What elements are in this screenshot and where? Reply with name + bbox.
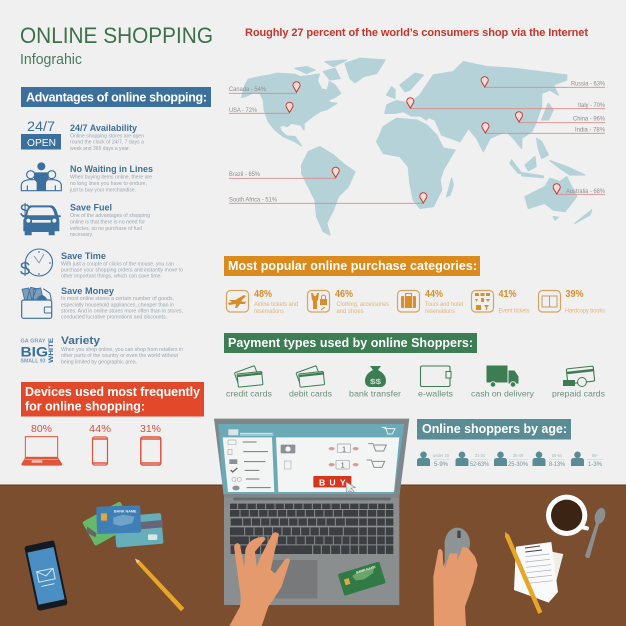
text: no waiting in lines: No Waiting in Lines — [70, 164, 153, 174]
payment: debit cards — [289, 366, 332, 398]
text: save money: conducted lucrative promotions and discounts. — [61, 315, 167, 321]
age group: 21-34 — [456, 452, 490, 468]
category: tours: Tours and hotel — [425, 301, 463, 308]
pencil — [135, 559, 184, 611]
heading: world consumers statement: Roughly 27 percent of the world’s consumers shop via the Internet — [245, 27, 588, 39]
category: hardcopy books: 39% — [566, 289, 584, 300]
icon: variety typography: WHITE — [48, 337, 55, 363]
icon: variety typography: SMALL 93 — [20, 359, 46, 365]
device: phone 44%: 44% — [89, 424, 111, 435]
payment: debit cards: debit cards — [289, 388, 332, 398]
payment: bank transfer: bank transfer — [349, 388, 401, 398]
text: no waiting in lines — [69, 164, 153, 194]
age group: 50-64 — [532, 452, 566, 468]
text: save money: In most online stores a certain number of goods, — [61, 296, 174, 302]
icon: 24/7 open: 24/7 — [27, 119, 55, 134]
panel: purchase categories — [224, 256, 605, 315]
icon: 24/7 open — [21, 119, 61, 150]
map: country labels: Italy - 70% — [578, 102, 605, 109]
icon: variety typography: GA GRAY — [20, 338, 46, 344]
heading: devices: Devices used most frequently — [25, 385, 200, 399]
payment: cash on delivery: cash on delivery — [471, 388, 535, 398]
text: save money — [61, 286, 183, 321]
screen quantity boxes: 1 — [341, 460, 345, 469]
map: country labels: China - 96% — [573, 116, 605, 122]
map: location pins — [286, 77, 560, 203]
icon: wallet with money — [22, 287, 52, 318]
screen quantity controls — [329, 447, 359, 466]
credit cards stack — [82, 501, 164, 548]
age group: 50-64: 50-64 — [552, 453, 562, 458]
device: phone 44% — [89, 424, 111, 465]
heading: payment: Payment types used by online Shoppers: — [228, 336, 473, 350]
laptop screen — [218, 424, 404, 494]
notes and pencil — [505, 532, 563, 614]
screen product area — [276, 437, 399, 492]
text: 24/7 availability: round the clock of 24/7, 7 days a — [70, 140, 145, 146]
map: country labels: Canada - 54% — [229, 86, 266, 93]
desk items: right side — [433, 495, 607, 626]
title: Infograhic — [20, 52, 82, 68]
spoon — [585, 507, 607, 558]
touchpad — [267, 560, 317, 598]
map: leader lines — [229, 87, 605, 203]
map: country labels: South Africa - 51% — [229, 196, 277, 204]
device: tablet 31% — [140, 424, 161, 465]
category: tours: 44% — [425, 289, 443, 300]
smartphone — [24, 540, 68, 611]
text: variety: being limited by geographic area. — [61, 360, 137, 366]
desk surface — [0, 484, 626, 626]
text: save fuel: Save Fuel — [70, 202, 112, 212]
category: clothing: 46% — [335, 289, 353, 300]
category: event tickets: 41% — [498, 289, 517, 300]
age group: under 20: under 20 — [433, 453, 449, 458]
text: save fuel: online is that there is no need for — [70, 220, 145, 226]
age group: 35-49 — [494, 452, 529, 468]
heading: payment — [224, 333, 477, 353]
chart: world map with country rates — [229, 58, 605, 235]
age group: 65 plus: 1-3% — [588, 462, 603, 468]
text: save fuel: necessary. — [70, 232, 93, 238]
map: country labels — [229, 80, 605, 204]
age group: 50-64: 8-13% — [549, 462, 566, 468]
panel: payment types — [224, 333, 605, 398]
category: airline tickets: 48% — [254, 289, 272, 300]
heading: age: Online shoppers by age: — [422, 422, 567, 436]
laptop lid — [214, 419, 409, 497]
text: no waiting in lines: no long lines you have to endure, — [70, 181, 147, 187]
hand on mouse — [433, 528, 478, 626]
payment: bank transfer — [349, 366, 401, 398]
screen cart icons — [367, 427, 395, 467]
icon: people in line — [21, 162, 61, 191]
map: country labels: Russia - 63% — [571, 80, 605, 88]
credit cards stack: BANK NAME — [114, 510, 137, 514]
text: variety: other parts of the country or even the world without — [61, 353, 178, 359]
category: clothing — [308, 289, 389, 315]
icon: dollar and clock: $ — [20, 259, 30, 279]
category: airline tickets — [226, 289, 298, 315]
category: airline tickets: reservations — [254, 308, 284, 315]
panel: devices — [21, 382, 204, 466]
mouse cursor — [346, 482, 355, 493]
map: country labels: USA - 72% — [229, 107, 257, 114]
category: hardcopy books: Hardcopy books — [565, 308, 605, 314]
heading: advantages — [21, 87, 211, 107]
payment: prepaid cards: prepaid cards — [552, 388, 605, 398]
text: variety: Variety — [61, 335, 101, 347]
category: event tickets — [472, 289, 530, 314]
panel: advantages of online shopping — [20, 87, 211, 366]
heading: categories — [224, 256, 480, 276]
text: save time: Save Time — [61, 251, 106, 261]
payment: prepaid cards — [552, 366, 605, 398]
text: save time: other important things, which can save time. — [61, 274, 162, 280]
age group: 65 plus — [571, 452, 603, 468]
map: country labels: Brazil - 65% — [229, 171, 260, 178]
category: tours: reservations — [425, 308, 455, 315]
category: clothing: and shoes — [336, 308, 364, 315]
text: save money: stores. And in online stores more often than in stores, — [61, 309, 183, 315]
title: ONLINE SHOPPING — [20, 23, 213, 48]
text: 24/7 availability — [69, 123, 145, 152]
device: laptop 80%: 80% — [31, 424, 52, 435]
screen quantity boxes: 1 — [342, 444, 346, 453]
text: save time: With just a couple of clicks of the mouse, you can — [61, 262, 174, 268]
text: no waiting in lines: just to buy your merchandise. — [69, 188, 136, 194]
panel: shoppers by age — [417, 419, 603, 468]
laptop base — [224, 497, 399, 605]
heading: advantages: Advantages of online shopping: — [26, 90, 207, 104]
age group: under 20 — [417, 452, 449, 468]
map: country labels: India - 78% — [575, 126, 605, 134]
age group: 21-34: 21-34 — [475, 453, 485, 458]
heading: devices — [21, 382, 204, 416]
payment: e-wallets — [418, 366, 453, 398]
device: laptop 80% — [21, 424, 62, 466]
text: save money: especially household appliances, cheaper than in — [61, 302, 174, 308]
icon: variety typography — [20, 337, 55, 365]
green bank card: BANK NAME — [356, 565, 377, 575]
text: save time — [61, 251, 183, 280]
age group: 21-34: 52-63% — [470, 462, 490, 468]
icon: dollar and car: $ — [20, 201, 30, 221]
buy button — [313, 476, 351, 487]
text: save time: purchase your shopping orders and instantly move to — [61, 268, 183, 274]
text: save fuel — [70, 202, 150, 238]
desk items: left side — [24, 501, 184, 611]
icon: 24/7 open: OPEN — [27, 138, 56, 149]
title — [20, 23, 213, 68]
text: 24/7 availability: 24/7 Availability — [70, 123, 137, 133]
text: save fuel: vehicles, so no purchase of fuel — [70, 226, 142, 232]
payment: credit cards — [226, 366, 272, 398]
icon: variety typography: BIG — [20, 344, 48, 360]
heading: age — [417, 419, 571, 440]
payment: cash on delivery — [471, 366, 535, 398]
device: tablet 31%: 31% — [140, 424, 161, 435]
laptop — [214, 419, 409, 626]
payment: bank transfer: $$ — [370, 379, 381, 386]
text: no waiting in lines: When buying items online, there are — [70, 174, 152, 180]
text: save money: Save Money — [61, 286, 114, 296]
coffee cup — [546, 495, 589, 536]
age group: under 20: 5-9% — [434, 462, 449, 468]
category: event tickets: Event tickets — [498, 308, 530, 314]
heading: categories: Most popular online purchase categories: — [228, 259, 477, 273]
text: save fuel: One of the advantages of shopping — [70, 213, 150, 219]
screen quantity boxes — [336, 444, 351, 469]
text: 24/7 availability: Online shopping stores are open — [70, 134, 144, 140]
buy button: BUY — [319, 477, 346, 487]
map: continents — [242, 58, 592, 235]
text: 24/7 availability: week and 365 days a year. — [69, 146, 130, 152]
age group: 65 plus: 65+ — [592, 453, 598, 458]
category: clothing: Clothing, accessories — [336, 301, 389, 308]
payment: credit cards: credit cards — [226, 388, 272, 398]
text: variety: When you shop online, you can shop from retailers in — [61, 347, 183, 353]
map: country labels: Australia - 68% — [566, 188, 605, 195]
age group: 35-49: 35-49 — [513, 453, 523, 458]
heading: devices: for online shopping: — [25, 400, 145, 414]
category: hardcopy books — [538, 289, 605, 314]
screen sidebar — [223, 437, 274, 492]
icon: dollar and car — [20, 201, 61, 235]
payment: e-wallets: e-wallets — [418, 388, 453, 398]
category: tours — [398, 289, 463, 315]
green bank card — [338, 561, 386, 596]
text: variety — [61, 335, 183, 366]
hand on keyboard — [229, 532, 290, 626]
keyboard — [230, 504, 393, 554]
age group: 35-49: 25-30% — [508, 462, 529, 468]
icon: dollar and clock — [20, 249, 52, 279]
category: airline tickets: Airline tickets and — [254, 301, 298, 308]
